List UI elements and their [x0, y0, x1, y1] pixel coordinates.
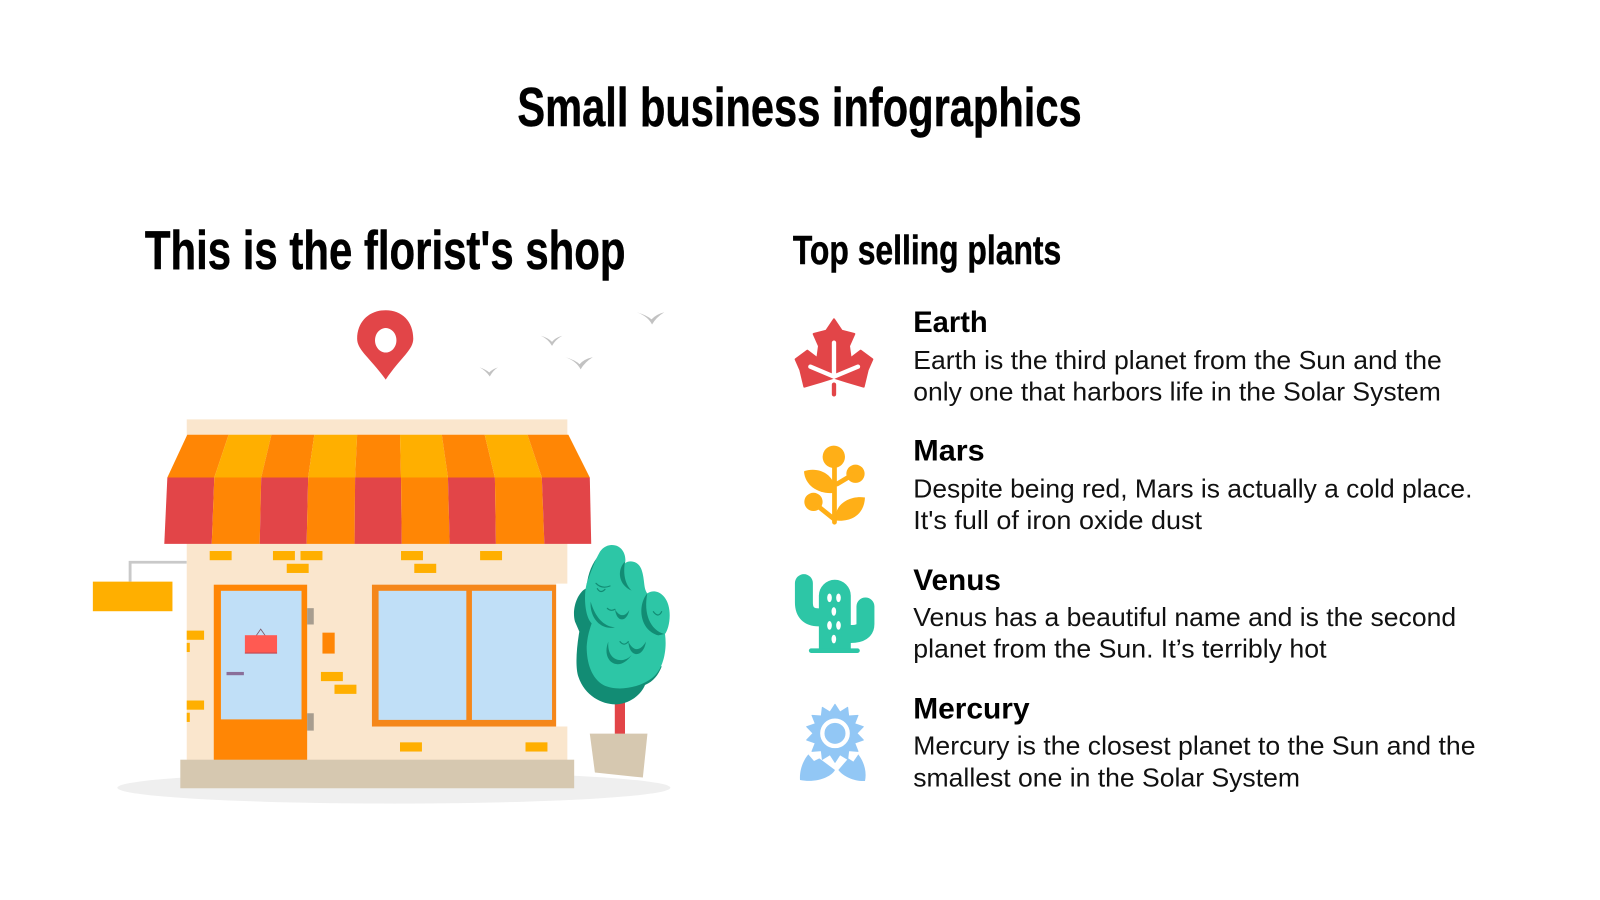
ground shadow	[117, 772, 670, 804]
shop step	[180, 760, 574, 788]
orange wall plaque	[322, 633, 335, 654]
Venus description: Venus has a beautiful name and is the second	[913, 602, 1456, 632]
Mars description: Despite being red, Mars is actually a cold place.	[913, 473, 1472, 503]
Mars heading: Mars	[913, 435, 985, 468]
icon: cactus	[804, 580, 865, 653]
awning	[164, 435, 591, 544]
Mars description: It's full of iron oxide dust	[913, 505, 1203, 535]
door sign	[245, 629, 277, 654]
Venus heading: Venus	[913, 564, 1001, 597]
icon: berry plant	[804, 446, 865, 522]
Venus description: planet from the Sun. It’s terribly hot	[913, 634, 1327, 664]
Mercury description: Mercury is the closest planet to the Sun and the	[913, 731, 1476, 761]
icon: maple leaf	[796, 319, 872, 394]
Earth description: only one that harbors life in the Solar System	[913, 377, 1441, 407]
shop wall	[187, 419, 567, 761]
shop window	[372, 585, 556, 727]
birds	[480, 312, 664, 377]
Mercury description	[913, 731, 1476, 792]
item: Mars	[804, 435, 1472, 535]
list: top selling plants	[796, 306, 1476, 792]
Venus description	[913, 602, 1456, 664]
item: Earth	[796, 306, 1442, 407]
potted tree	[574, 545, 670, 778]
icon: location pin	[357, 310, 413, 380]
Mercury description: smallest one in the Solar System	[913, 762, 1300, 792]
title: Small business infographics	[517, 76, 1082, 138]
Mercury heading: Mercury	[913, 692, 1030, 725]
Earth description	[913, 345, 1442, 407]
heading: florist's shop: This is the florist's shop	[145, 219, 626, 281]
illustration: florist's shop	[93, 310, 670, 804]
heading: top selling plants: Top selling plants	[793, 227, 1061, 273]
wall bricks	[187, 551, 547, 752]
Mars description	[913, 473, 1472, 535]
item: Venus	[804, 564, 1456, 664]
hanging sign	[93, 562, 187, 611]
icon: sunflower	[800, 704, 866, 781]
door handle	[227, 672, 244, 675]
Earth heading: Earth	[913, 306, 988, 339]
Earth description: Earth is the third planet from the Sun and the	[913, 345, 1442, 375]
door	[214, 585, 314, 761]
item: Mercury	[800, 692, 1476, 792]
shopfront	[93, 419, 591, 788]
